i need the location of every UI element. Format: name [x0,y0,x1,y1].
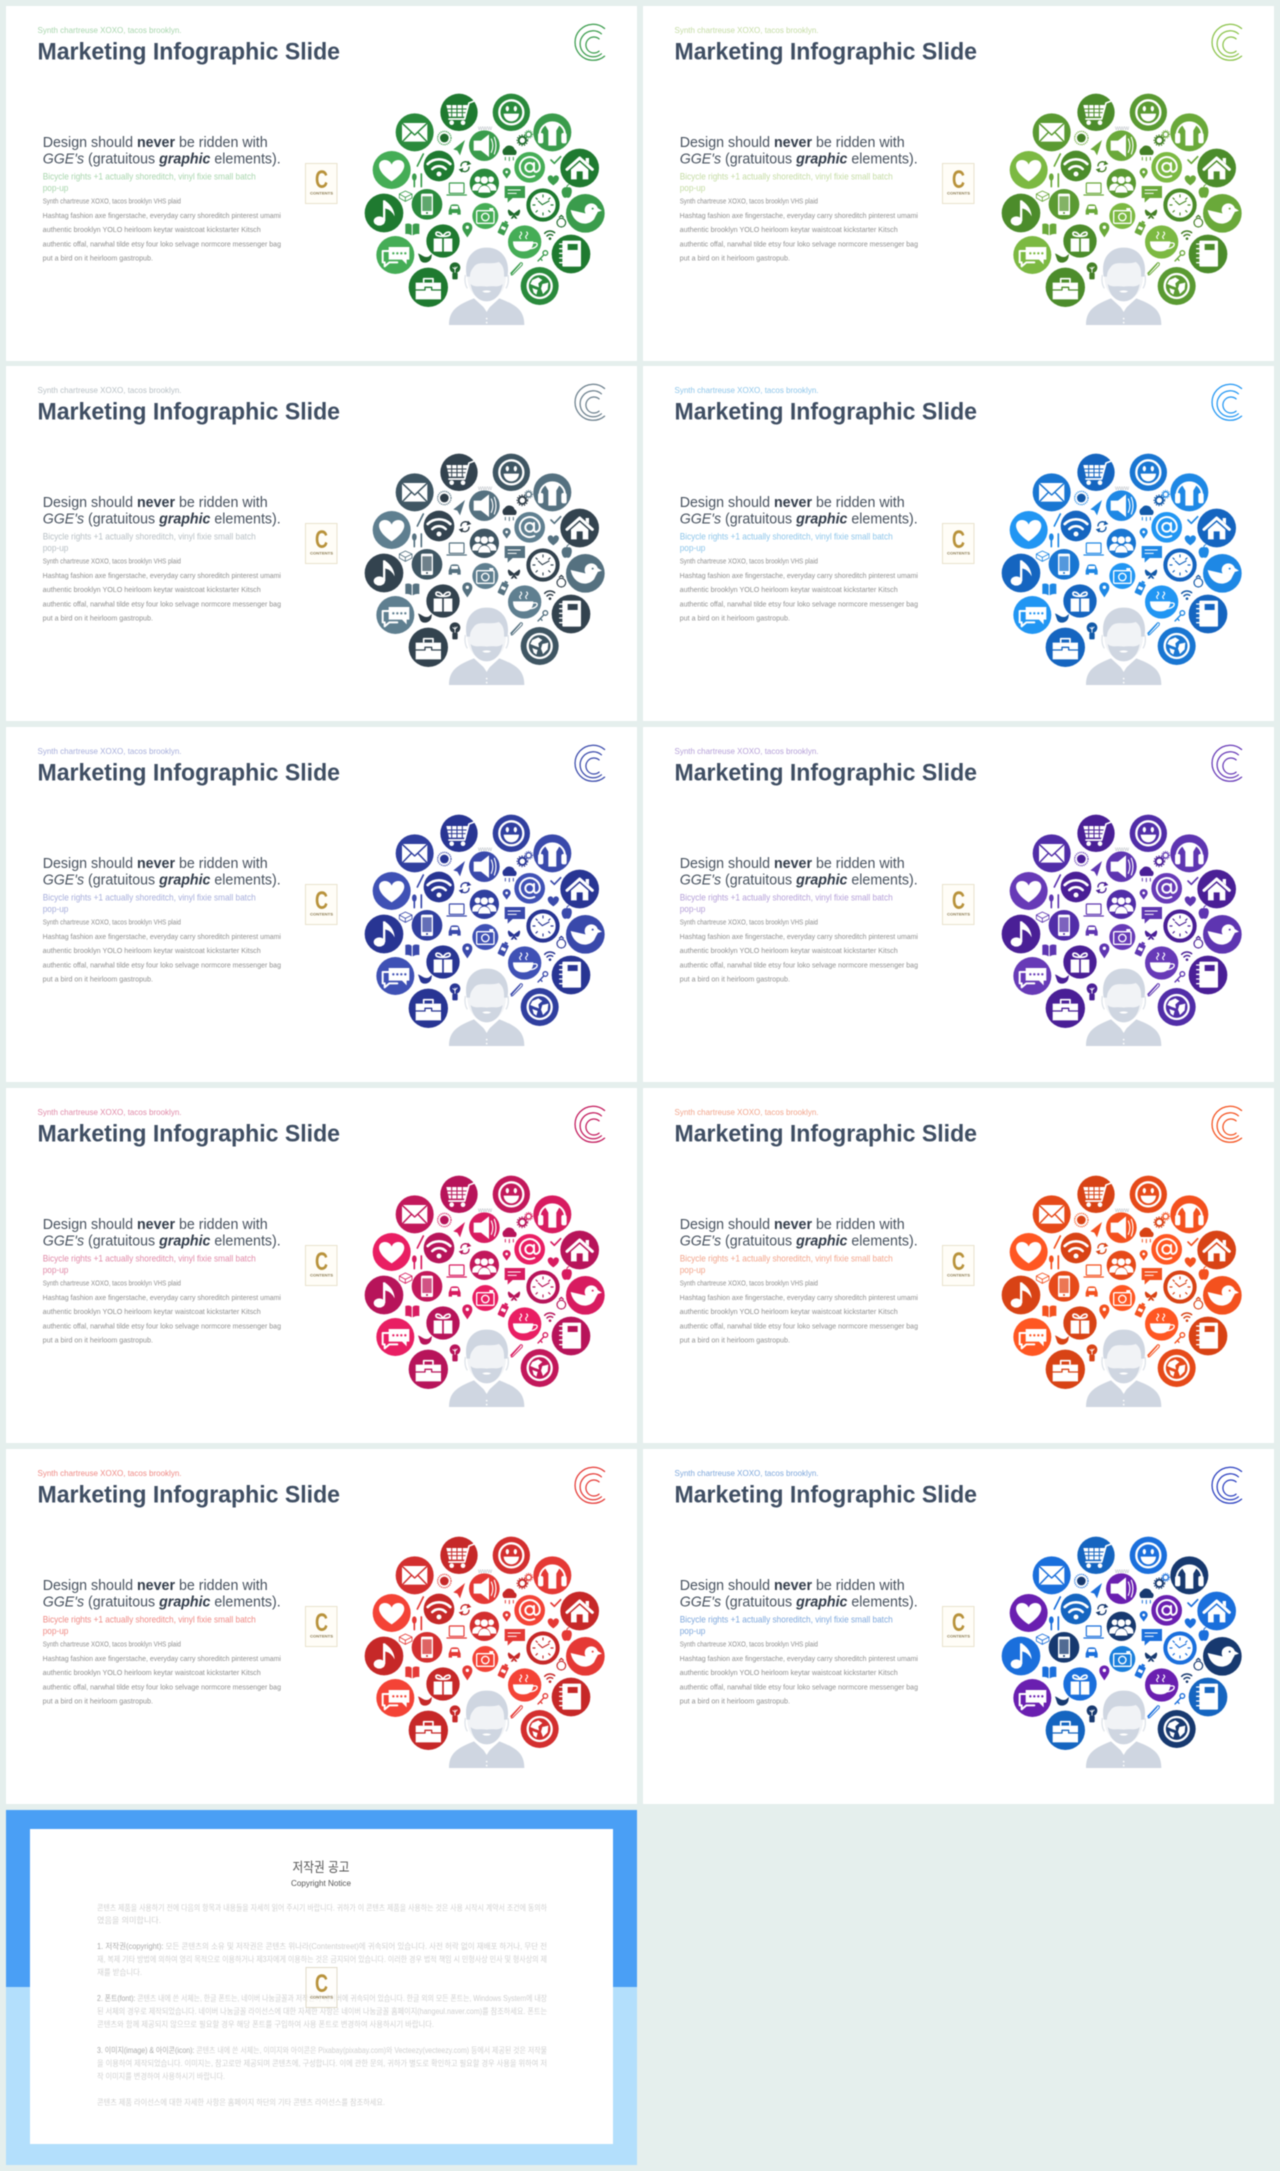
body text [680,1641,918,1705]
eyebrow text: Synth chartreuse XOXO, tacos brooklyn. [674,1107,818,1117]
badge: contents [306,885,337,925]
eyebrow text: Synth chartreuse XOXO, tacos brooklyn. [674,746,818,756]
body text: Synth chartreuse XOXO, tacos brooklyn VHS plaid [680,198,818,205]
icon: logo rings [1212,745,1242,781]
notice header band [6,1810,637,1987]
icon cluster: www [1114,1568,1129,1574]
body text: authentic offal, narwhal tilde etsy four loko selvage normcore messenger bag [43,962,281,969]
title: Marketing Infographic Slide [674,760,977,787]
heading [43,495,281,528]
body text: put a bird on it heirloom gastropub. [680,976,790,983]
badge: contents: CONTENTS [310,1634,334,1638]
notice card [30,1829,613,2144]
body text: authentic offal, narwhal tilde etsy four loko selvage normcore messenger bag [680,1323,918,1330]
body text: authentic brooklyn YOLO heirloom keytar waistcoat kickstarter Kitsch [680,948,898,955]
badge: contents [306,1968,337,2008]
icon cluster [1002,815,1242,1046]
body text: Synth chartreuse XOXO, tacos brooklyn VHS plaid [43,920,181,927]
icon cluster [1002,1536,1242,1768]
body text: Hashtag fashion axe fingerstache, everyday carry shoreditch pinterest umami [680,934,918,941]
notice body text: 3. 이미지(image) & 아이콘(icon): 콘텐츠 내에 쓴 서체는, 이미지와 아이콘은 Pixabay(pixabay.com)와 Vecteezy(vecteezy.com) 등에서 제공된 것은 저작물 [97,2045,547,2055]
coloured subheading: pop-up [680,543,705,554]
icon cluster [1002,93,1242,325]
panel: multicolour blue slide [643,1448,1274,1804]
icon: logo rings [575,24,605,60]
coloured subheading: pop-up [680,1265,705,1276]
badge: contents [942,163,974,203]
body text [680,559,918,623]
heading: Design should never be ridden with [43,495,268,511]
coloured subheading: pop-up [43,543,68,554]
heading: GGE's (gratuitous graphic elements). [680,512,918,528]
badge: contents: CONTENTS [310,913,334,917]
body text [680,1280,918,1344]
badge: contents [306,1606,337,1646]
title: Marketing Infographic Slide [38,1120,340,1147]
body text: Hashtag fashion axe fingerstache, everyday carry shoreditch pinterest umami [43,1295,281,1302]
notice body text: 1. 저작권(copyright): 모든 콘텐츠의 소유 및 저작권은 콘텐츠 위나라(Contentstreet)에 귀속되어 있습니다. 사전 허락 없이 재배포 하거나, 무단 전 [97,1941,547,1951]
heading: Design should never be ridden with [43,1217,268,1233]
coloured subheading [680,1253,893,1276]
coloured subheading: pop-up [43,183,68,194]
icon cluster: www [477,1568,492,1574]
notice body text: 2. 폰트(font): 콘텐츠 내에 쓴 서체는, 한글 폰트는, 네이버 나눔글꼴과 저작권이 네이버에 귀속되어 있습니다. 한글 외의 모든 폰트는, Windows System에 내장 [97,1993,548,2003]
body text: authentic brooklyn YOLO heirloom keytar waistcoat kickstarter Kitsch [43,587,261,594]
eyebrow text: Synth chartreuse XOXO, tacos brooklyn. [674,25,818,35]
icon: logo rings [1212,24,1242,60]
badge: contents: CONTENTS [947,191,971,195]
heading [680,495,918,528]
coloured subheading: Bicycle rights +1 actually shoreditch, vinyl fixie small batch [43,1614,256,1625]
coloured subheading [43,1614,256,1636]
coloured subheading: Bicycle rights +1 actually shoreditch, vinyl fixie small batch [680,1614,893,1625]
coloured subheading: Bicycle rights +1 actually shoreditch, vinyl fixie small batch [43,532,256,543]
eyebrow text: Synth chartreuse XOXO, tacos brooklyn. [38,1107,182,1117]
heading: GGE's (gratuitous graphic elements). [680,1594,918,1610]
panel: indigo slide [6,727,637,1082]
coloured subheading [680,1614,893,1636]
body text: Hashtag fashion axe fingerstache, everyday carry shoreditch pinterest umami [680,573,918,580]
title: Marketing Infographic Slide [674,1481,977,1508]
coloured subheading: Bicycle rights +1 actually shoreditch, vinyl fixie small batch [680,171,893,182]
body text [680,920,918,983]
heading: GGE's (gratuitous graphic elements). [680,1233,918,1249]
coloured subheading: pop-up [43,1626,68,1636]
badge: contents: C [952,1248,965,1276]
body text: Hashtag fashion axe fingerstache, everyday carry shoreditch pinterest umami [680,1295,918,1302]
body text: Synth chartreuse XOXO, tacos brooklyn VHS plaid [43,1641,181,1648]
body text: Synth chartreuse XOXO, tacos brooklyn VHS plaid [680,920,818,927]
body text: put a bird on it heirloom gastropub. [680,1698,790,1705]
panel: orange slide [643,1088,1274,1443]
title: Marketing Infographic Slide [38,760,340,787]
heading: GGE's (gratuitous graphic elements). [680,873,918,889]
badge: contents: CONTENTS [947,913,971,917]
coloured subheading: Bicycle rights +1 actually shoreditch, vinyl fixie small batch [43,893,256,904]
badge: contents [306,1245,337,1285]
body text [43,1641,281,1705]
body text [43,1280,281,1344]
body text: authentic brooklyn YOLO heirloom keytar waistcoat kickstarter Kitsch [680,587,898,594]
body text: Synth chartreuse XOXO, tacos brooklyn VHS plaid [43,1280,181,1287]
heading: Design should never be ridden with [680,495,905,511]
badge: contents: CONTENTS [310,191,334,195]
badge: contents: CONTENTS [947,552,971,556]
notice body text: 콘텐츠 제품 라이선스에 대한 자세한 사항은 홈페이지 하단의 기타 콘텐츠 라이선스를 참조하세요. [97,2097,385,2107]
eyebrow text: Synth chartreuse XOXO, tacos brooklyn. [38,385,182,395]
title: Marketing Infographic Slide [38,1481,340,1508]
badge: contents: C [315,166,328,194]
icon cluster: www [1114,1207,1129,1214]
eyebrow text: Synth chartreuse XOXO, tacos brooklyn. [38,746,182,756]
heading [43,856,281,889]
coloured subheading [680,893,893,915]
badge: contents [306,524,337,564]
badge: contents [306,163,337,203]
heading [680,135,918,167]
body text: authentic offal, narwhal tilde etsy four loko selvage normcore messenger bag [680,962,918,969]
notice title: 저작권 공고 [292,1860,350,1875]
notice body text: 재를 받습니다. [97,1967,142,1977]
heading [680,1578,918,1610]
body text: put a bird on it heirloom gastropub. [680,255,790,262]
notice body text: 콘텐츠 제품을 사용하기 전에 다음의 항목과 내용들을 자세히 읽어 주시기 바랍니다. 귀하가 이 콘텐츠 제품을 사용하는 것은 사용 시작시 계약서 조건에 동의하 [97,1903,548,1913]
body text: put a bird on it heirloom gastropub. [43,976,153,983]
heading: Design should never be ridden with [43,1578,268,1594]
body text: authentic brooklyn YOLO heirloom keytar waistcoat kickstarter Kitsch [43,948,261,955]
panel: lime slide [643,6,1274,361]
coloured subheading: Bicycle rights +1 actually shoreditch, vinyl fixie small batch [680,532,893,543]
heading: GGE's (gratuitous graphic elements). [43,873,281,889]
body text: authentic brooklyn YOLO heirloom keytar waistcoat kickstarter Kitsch [680,1670,898,1676]
heading [43,1217,281,1249]
body text: Synth chartreuse XOXO, tacos brooklyn VHS plaid [43,559,181,566]
coloured subheading: pop-up [680,904,705,915]
heading: Design should never be ridden with [680,1217,905,1233]
body text: authentic brooklyn YOLO heirloom keytar waistcoat kickstarter Kitsch [43,1670,261,1676]
icon: logo rings [1212,1106,1242,1142]
badge: contents: CONTENTS [947,1273,971,1277]
heading [680,856,918,889]
coloured subheading: pop-up [43,1265,68,1276]
icon cluster [365,454,605,685]
heading: Design should never be ridden with [43,856,268,872]
notice body text: 콘텐츠와 함께 제공되지 않으므로 필요할 경우 해당 폰트를 구입하여 사용 폰트로 변경하여 사용하시기 바랍니다. [97,2019,434,2029]
coloured subheading [680,171,893,194]
body text: authentic offal, narwhal tilde etsy four loko selvage normcore messenger bag [680,241,918,248]
icon cluster: www [1114,846,1129,853]
badge: contents: C [315,1608,328,1636]
coloured subheading [43,1253,256,1276]
body text [43,920,281,983]
body text: put a bird on it heirloom gastropub. [43,1698,153,1705]
body text: put a bird on it heirloom gastropub. [43,1337,153,1344]
body text: authentic brooklyn YOLO heirloom keytar waistcoat kickstarter Kitsch [680,1309,898,1316]
badge: contents: CONTENTS [310,552,334,556]
badge: contents [942,1245,974,1285]
icon: logo rings [1212,1467,1242,1503]
coloured subheading: pop-up [680,183,705,194]
body text: authentic offal, narwhal tilde etsy four loko selvage normcore messenger bag [680,602,918,609]
badge: contents: C [952,1608,965,1636]
icon: logo rings [575,745,605,781]
notice body text: 작 이미지를 변경하여 사용하시기 바랍니다. [97,2071,225,2081]
body text: put a bird on it heirloom gastropub. [43,616,153,623]
body text: Synth chartreuse XOXO, tacos brooklyn VHS plaid [680,559,818,566]
eyebrow text: Synth chartreuse XOXO, tacos brooklyn. [38,1468,182,1478]
notice body text: 재, 복제 기타 방법에 의하여 영리 목적으로 이용하거나 제3자에게 이용하는 것은 금지되어 있습니다. 이러한 경우 법적 책임 시 민형사상 민사 및 형사상의 제 [97,1954,547,1964]
coloured subheading [43,532,256,554]
heading: Design should never be ridden with [43,135,268,151]
heading [43,135,281,167]
body text: authentic offal, narwhal tilde etsy four loko selvage normcore messenger bag [43,602,281,609]
badge: contents [942,1606,974,1646]
panel: purple slide [643,727,1274,1082]
body text [43,198,281,262]
body text: Hashtag fashion axe fingerstache, everyday carry shoreditch pinterest umami [43,934,281,941]
icon: logo rings [575,1467,605,1503]
eyebrow text: Synth chartreuse XOXO, tacos brooklyn. [674,1468,818,1478]
heading: GGE's (gratuitous graphic elements). [43,512,281,528]
icon: logo rings [575,385,605,421]
title: Marketing Infographic Slide [38,399,340,426]
body text: authentic brooklyn YOLO heirloom keytar waistcoat kickstarter Kitsch [43,1309,261,1316]
coloured subheading [680,532,893,554]
body text: authentic brooklyn YOLO heirloom keytar waistcoat kickstarter Kitsch [680,227,898,234]
panel: green slide [6,6,637,361]
icon cluster: www [477,1207,492,1214]
body text: authentic offal, narwhal tilde etsy four loko selvage normcore messenger bag [43,241,281,248]
body text: Synth chartreuse XOXO, tacos brooklyn VHS plaid [680,1280,818,1287]
badge: contents: C [952,887,965,915]
body text: Hashtag fashion axe fingerstache, everyday carry shoreditch pinterest umami [680,213,918,220]
panel: red slide [6,1448,637,1804]
body text: Synth chartreuse XOXO, tacos brooklyn VHS plaid [680,1641,818,1648]
icon cluster [365,93,605,325]
body text: authentic offal, narwhal tilde etsy four loko selvage normcore messenger bag [43,1323,281,1330]
icon cluster: www [477,846,492,853]
icon cluster: www [1114,485,1129,492]
coloured subheading: Bicycle rights +1 actually shoreditch, vinyl fixie small batch [43,1253,256,1264]
panel: copyright notice [6,1810,637,2165]
body text [680,198,918,262]
body text: Hashtag fashion axe fingerstache, everyday carry shoreditch pinterest umami [680,1656,918,1662]
badge: contents: CONTENTS [947,1634,971,1638]
eyebrow text: Synth chartreuse XOXO, tacos brooklyn. [674,385,818,395]
title: Marketing Infographic Slide [38,38,340,65]
title: Marketing Infographic Slide [674,399,977,426]
title: Marketing Infographic Slide [674,38,977,65]
body text: authentic offal, narwhal tilde etsy four loko selvage normcore messenger bag [43,1684,281,1691]
icon cluster [365,1175,605,1407]
body text: put a bird on it heirloom gastropub. [680,616,790,623]
heading: GGE's (gratuitous graphic elements). [43,151,281,167]
heading [680,1217,918,1249]
coloured subheading: pop-up [680,1626,705,1636]
coloured subheading: Bicycle rights +1 actually shoreditch, vinyl fixie small batch [43,171,256,182]
icon: logo rings [1212,385,1242,421]
icon cluster [1002,454,1242,685]
eyebrow text: Synth chartreuse XOXO, tacos brooklyn. [38,25,182,35]
icon cluster: www [1114,125,1129,132]
heading [43,1578,281,1610]
badge: contents: C [315,526,328,554]
badge: contents: C [315,1248,328,1276]
panel: pink slide [6,1088,637,1443]
badge: contents: C [315,887,328,915]
icon cluster [365,815,605,1046]
badge: contents: C [952,526,965,554]
heading: GGE's (gratuitous graphic elements). [680,151,918,167]
icon cluster [365,1536,605,1768]
icon cluster: www [477,125,492,132]
heading: GGE's (gratuitous graphic elements). [43,1233,281,1249]
coloured subheading: Bicycle rights +1 actually shoreditch, vinyl fixie small batch [680,1253,893,1264]
body text: authentic offal, narwhal tilde etsy four loko selvage normcore messenger bag [680,1684,918,1691]
body text: Hashtag fashion axe fingerstache, everyday carry shoreditch pinterest umami [43,1656,281,1662]
badge: contents: CONTENTS [310,1273,334,1277]
heading: Design should never be ridden with [680,135,905,151]
notice subtitle: Copyright Notice [291,1878,351,1888]
badge: contents: C [315,1970,328,1998]
body text [43,559,281,623]
body text: Hashtag fashion axe fingerstache, everyday carry shoreditch pinterest umami [43,213,281,220]
body text: put a bird on it heirloom gastropub. [680,1337,790,1344]
coloured subheading [43,893,256,915]
body text: put a bird on it heirloom gastropub. [43,255,153,262]
notice body text: 된 서체의 경우로 제작되었습니다. 네이버 나눔글꼴 라이선스에 대한 자세한 사항은 네이버 나눔글꼴 홈페이지(hangeul.naver.com)를 참조하세요. 폰트는 [97,2006,547,2016]
title: Marketing Infographic Slide [674,1120,977,1147]
icon cluster [1002,1175,1242,1407]
badge: contents: CONTENTS [310,1996,334,2000]
body text: Hashtag fashion axe fingerstache, everyday carry shoreditch pinterest umami [43,573,281,580]
body text: Synth chartreuse XOXO, tacos brooklyn VHS plaid [43,198,181,205]
notice body text: 을 이용하여 제작되었습니다. 이미지는, 참고로만 제공되며 콘텐츠에, 구성합니다. 이에 관한 문의, 귀하가 별도로 확인하고 필요할 경우 사용을 위하여 저 [97,2058,547,2068]
notice body text [97,1903,548,2107]
icon: logo rings [575,1106,605,1142]
panel: slate slide [6,366,637,721]
heading: Design should never be ridden with [680,856,905,872]
badge: contents [942,524,974,564]
badge: contents: C [952,166,965,194]
notice body text: 였음을 의미합니다. [97,1915,161,1925]
panel: blue slide [643,366,1274,721]
coloured subheading [43,171,256,194]
body text: authentic brooklyn YOLO heirloom keytar waistcoat kickstarter Kitsch [43,227,261,234]
badge: contents [942,885,974,925]
heading: GGE's (gratuitous graphic elements). [43,1594,281,1610]
coloured subheading: Bicycle rights +1 actually shoreditch, vinyl fixie small batch [680,893,893,904]
coloured subheading: pop-up [43,904,68,915]
heading: Design should never be ridden with [680,1578,905,1594]
icon cluster: www [477,485,492,492]
